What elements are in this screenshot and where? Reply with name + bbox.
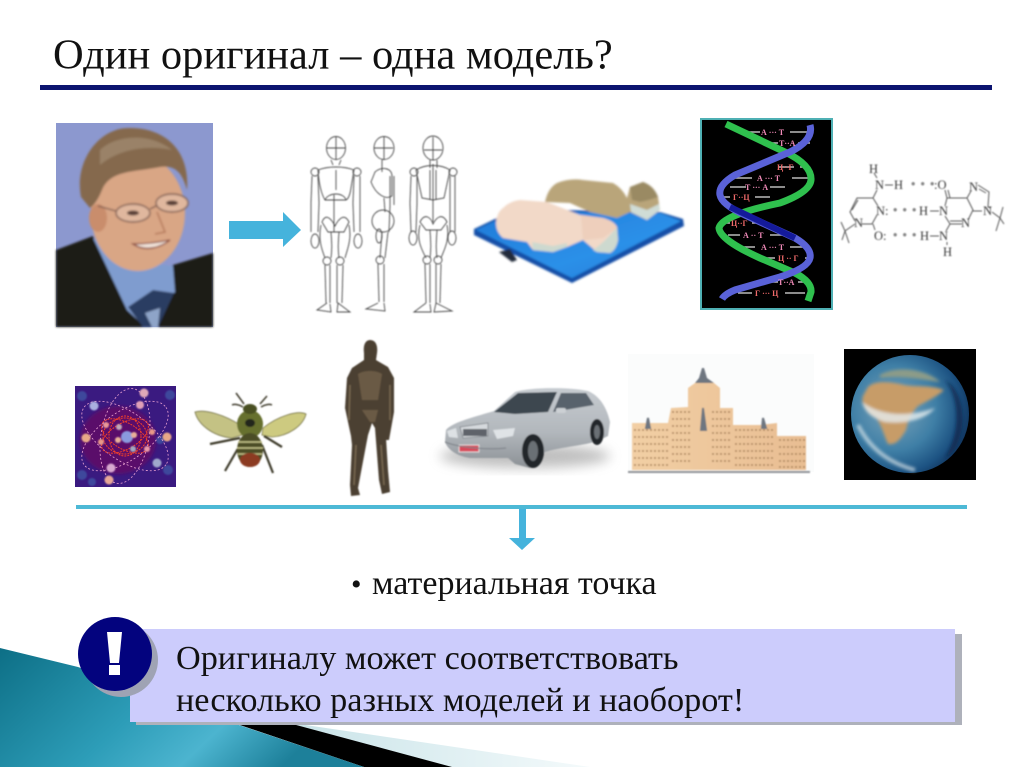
image: base pair chemical formula: N	[939, 204, 948, 218]
image: atom model	[70, 385, 180, 487]
DNA base letters	[731, 128, 799, 298]
DNA base letters: Ц ·· Г	[778, 254, 799, 263]
DNA base letters: А ·· Т	[743, 231, 764, 240]
DNA base letters: А ··· Т	[761, 128, 785, 137]
image: DNA double helix	[701, 119, 832, 309]
image: bronze human figure	[345, 340, 394, 496]
DNA base letters: А ··· Т	[757, 174, 781, 183]
image: base pair chemical formula: • • •	[911, 177, 935, 191]
image: silver car	[440, 388, 610, 468]
callout text: Оригиналу может соответствовать	[176, 640, 679, 677]
callout	[78, 617, 962, 725]
image: CPR training manikins on blue mat	[474, 179, 684, 283]
DNA base letters: А ··· Т	[761, 243, 785, 252]
image: base pair chemical formula: H	[869, 162, 878, 176]
title underline	[40, 85, 992, 90]
DNA base pairs	[722, 132, 810, 293]
arrow: photo to models	[229, 212, 301, 247]
image: base pair chemical formula: H	[920, 229, 929, 243]
arrow: down to answer	[509, 509, 535, 550]
callout icon: exclamation mark	[78, 617, 158, 697]
image: base pair chemical formula: H	[919, 204, 928, 218]
image: skeleton drawing, three views	[311, 136, 457, 312]
image: base pair chemical formula: O:	[874, 229, 886, 243]
horizontal bracket line	[76, 505, 967, 509]
image: base pair chemical formula: N	[939, 229, 948, 243]
DNA base letters: Г··Ц	[733, 193, 750, 202]
bullet text: •	[351, 568, 362, 601]
image: base pair chemical formula: :O	[934, 178, 946, 192]
image: planet Earth	[844, 349, 976, 480]
image: base pair chemical formula: N	[983, 204, 992, 218]
title: Один оригинал – одна модель?	[53, 32, 613, 78]
bullet text: материальная точка	[372, 565, 657, 602]
image: base pair chemical formula: N	[961, 216, 970, 230]
image: base pair chemical formula: N	[854, 216, 863, 230]
DNA base letters: Т ··· А	[745, 183, 768, 192]
image: base pair chemical formula: N:	[876, 204, 888, 218]
callout panel	[130, 629, 955, 722]
image: base pair chemical formula: H	[943, 245, 952, 259]
DNA base letters: Т··А	[779, 139, 796, 148]
skeleton: front view	[311, 136, 362, 312]
DNA base letters: Ц··Г	[731, 219, 748, 228]
skeleton: back view	[409, 136, 457, 312]
skeleton: side view	[366, 136, 394, 311]
image: bee	[195, 393, 306, 473]
DNA base letters: Т··А	[778, 278, 795, 287]
image: base pair chemical formula: N	[969, 180, 978, 194]
DNA base letters: Г ··· Ц	[755, 289, 779, 298]
callout text: несколько разных моделей и наоборот!	[176, 682, 744, 719]
image: base pair chemical formula	[841, 162, 1004, 259]
image: high-rise building	[628, 354, 814, 473]
callout shadow	[136, 634, 962, 725]
DNA base letters: Ц··Г	[777, 163, 794, 172]
image: base pair chemical formula: • • •	[893, 228, 917, 242]
image: base pair chemical formula: • • •	[893, 203, 917, 217]
image: base pair chemical formula: H	[894, 178, 903, 192]
image: portrait photo	[56, 123, 213, 327]
bottom-left decorative corner	[0, 648, 590, 767]
image: base pair chemical formula: N	[875, 178, 884, 192]
